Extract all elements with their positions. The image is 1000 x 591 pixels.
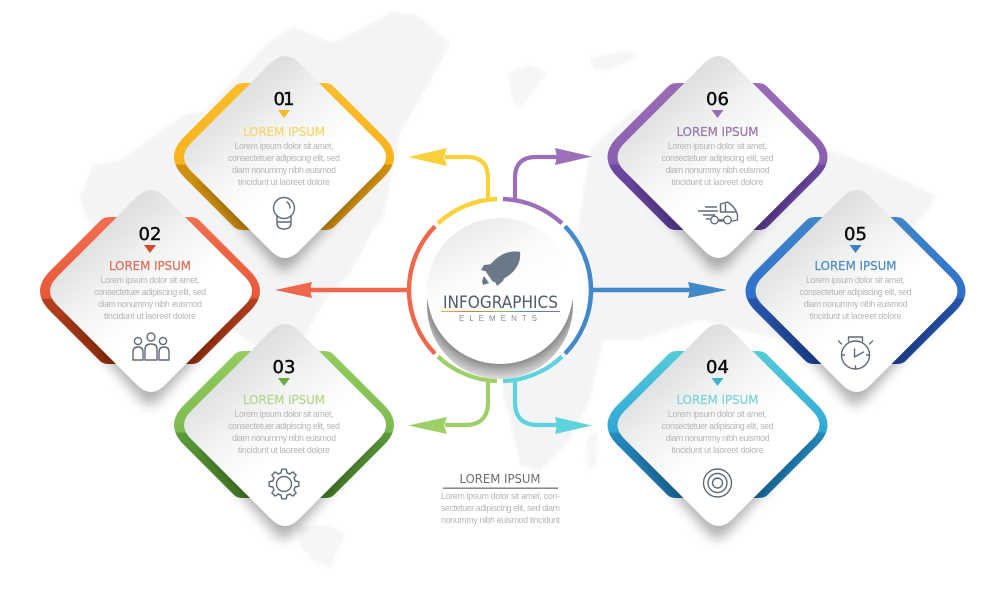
body text — [800, 275, 912, 321]
body text: consectetuer adipiscing elit, sed — [228, 153, 340, 163]
icon: target — [704, 469, 732, 497]
card 06 — [608, 56, 828, 271]
body text: Lorem ipsum dolor sit amet, — [234, 409, 334, 419]
body text: Lorem ipsum dolor sit amet, — [234, 141, 334, 151]
heading: LOREM IPSUM — [814, 258, 896, 273]
body text: tincidunt ut laoreet dolore — [238, 177, 330, 187]
card 03 — [174, 324, 394, 539]
body text: diam nonummy nibh euismod — [98, 299, 202, 309]
body text: diam nonummy nibh euismod — [232, 433, 336, 443]
body text: Lorem ipsum dolor sit amet, — [806, 275, 905, 285]
footer note — [441, 472, 561, 525]
icon: rocket — [481, 252, 520, 286]
footer heading: LOREM IPSUM — [460, 472, 540, 486]
body text: consectetuer adipiscing elit, sed — [94, 287, 206, 297]
body text: Lorem ipsum dolor sit amet, — [668, 409, 767, 419]
number 06: 06 — [706, 89, 729, 110]
icon: gear — [269, 469, 299, 499]
number 02: 02 — [138, 224, 162, 245]
body text: tincidunt ut laoreet dolore — [672, 445, 764, 455]
body text: diam nonummy nibh euismod — [666, 165, 770, 175]
icon: delivery truck — [698, 202, 738, 224]
footer text: Lorem ipsum dolor sit amet, con- — [441, 491, 560, 501]
central ring and arrows — [275, 148, 727, 434]
marker triangle — [278, 110, 290, 118]
card 02 — [40, 190, 260, 405]
heading: LOREM IPSUM — [109, 258, 191, 273]
body text — [662, 141, 774, 187]
center title: INFOGRAPHICS — [443, 293, 558, 313]
arrow: blue to card 05 — [565, 226, 727, 354]
heading: LOREM IPSUM — [676, 124, 758, 139]
arrow: red to card 02 — [275, 226, 435, 354]
body text: diam nonummy nibh euismod — [804, 299, 908, 309]
arrow: purple to card 06 — [503, 148, 592, 223]
marker triangle — [712, 110, 724, 118]
body text: diam nonummy nibh euismod — [666, 433, 770, 443]
body text — [228, 141, 340, 187]
heading: LOREM IPSUM — [243, 392, 325, 407]
arrow: cyan to card 04 — [503, 357, 592, 434]
body text: Lorem ipsum dolor sit amet, — [100, 275, 200, 285]
number 03: 03 — [272, 357, 296, 378]
body text: tincidunt ut laoreet dolore — [810, 311, 902, 321]
body text — [228, 409, 340, 455]
body text: tincidunt ut laoreet dolore — [104, 311, 196, 321]
arrow: green to card 03 — [408, 357, 497, 434]
card 01 — [174, 56, 394, 271]
icon: light bulb — [274, 198, 294, 229]
body text: tincidunt ut laoreet dolore — [238, 445, 330, 455]
marker triangle — [712, 378, 724, 386]
body text: consectetuer adipiscing elit, sed — [662, 421, 774, 431]
body text: tincidunt ut laoreet dolore — [672, 177, 764, 187]
arrow: yellow to card 01 — [408, 148, 497, 223]
footer text — [441, 491, 561, 525]
body text: Lorem ipsum dolor sit amet, — [668, 141, 767, 151]
marker triangle — [850, 245, 862, 253]
card 05 — [746, 190, 966, 405]
number 05: 05 — [844, 224, 867, 245]
body text: consectetuer adipiscing elit, sed — [662, 153, 774, 163]
center subtitle: E L E M E N T S — [459, 314, 537, 323]
body text: consectetuer adipiscing elit, sed — [800, 287, 912, 297]
icon: people — [133, 333, 169, 360]
body text — [94, 275, 206, 321]
center circle — [412, 203, 588, 379]
body text — [662, 409, 774, 455]
number 04: 04 — [706, 357, 729, 378]
footer text: nonummy nibh euismod tincidunt — [441, 515, 561, 525]
body text: diam nonummy nibh euismod — [232, 165, 336, 175]
heading: LOREM IPSUM — [243, 124, 325, 139]
body text: consectetuer adipiscing elit, sed — [228, 421, 340, 431]
marker triangle — [144, 245, 156, 253]
card 04 — [608, 324, 828, 539]
heading: LOREM IPSUM — [676, 392, 758, 407]
icon: stopwatch — [838, 337, 872, 369]
marker triangle — [278, 378, 290, 386]
footer text: sectetuer adipiscing elit, sed diam — [441, 503, 560, 513]
number 01: 01 — [274, 89, 294, 110]
